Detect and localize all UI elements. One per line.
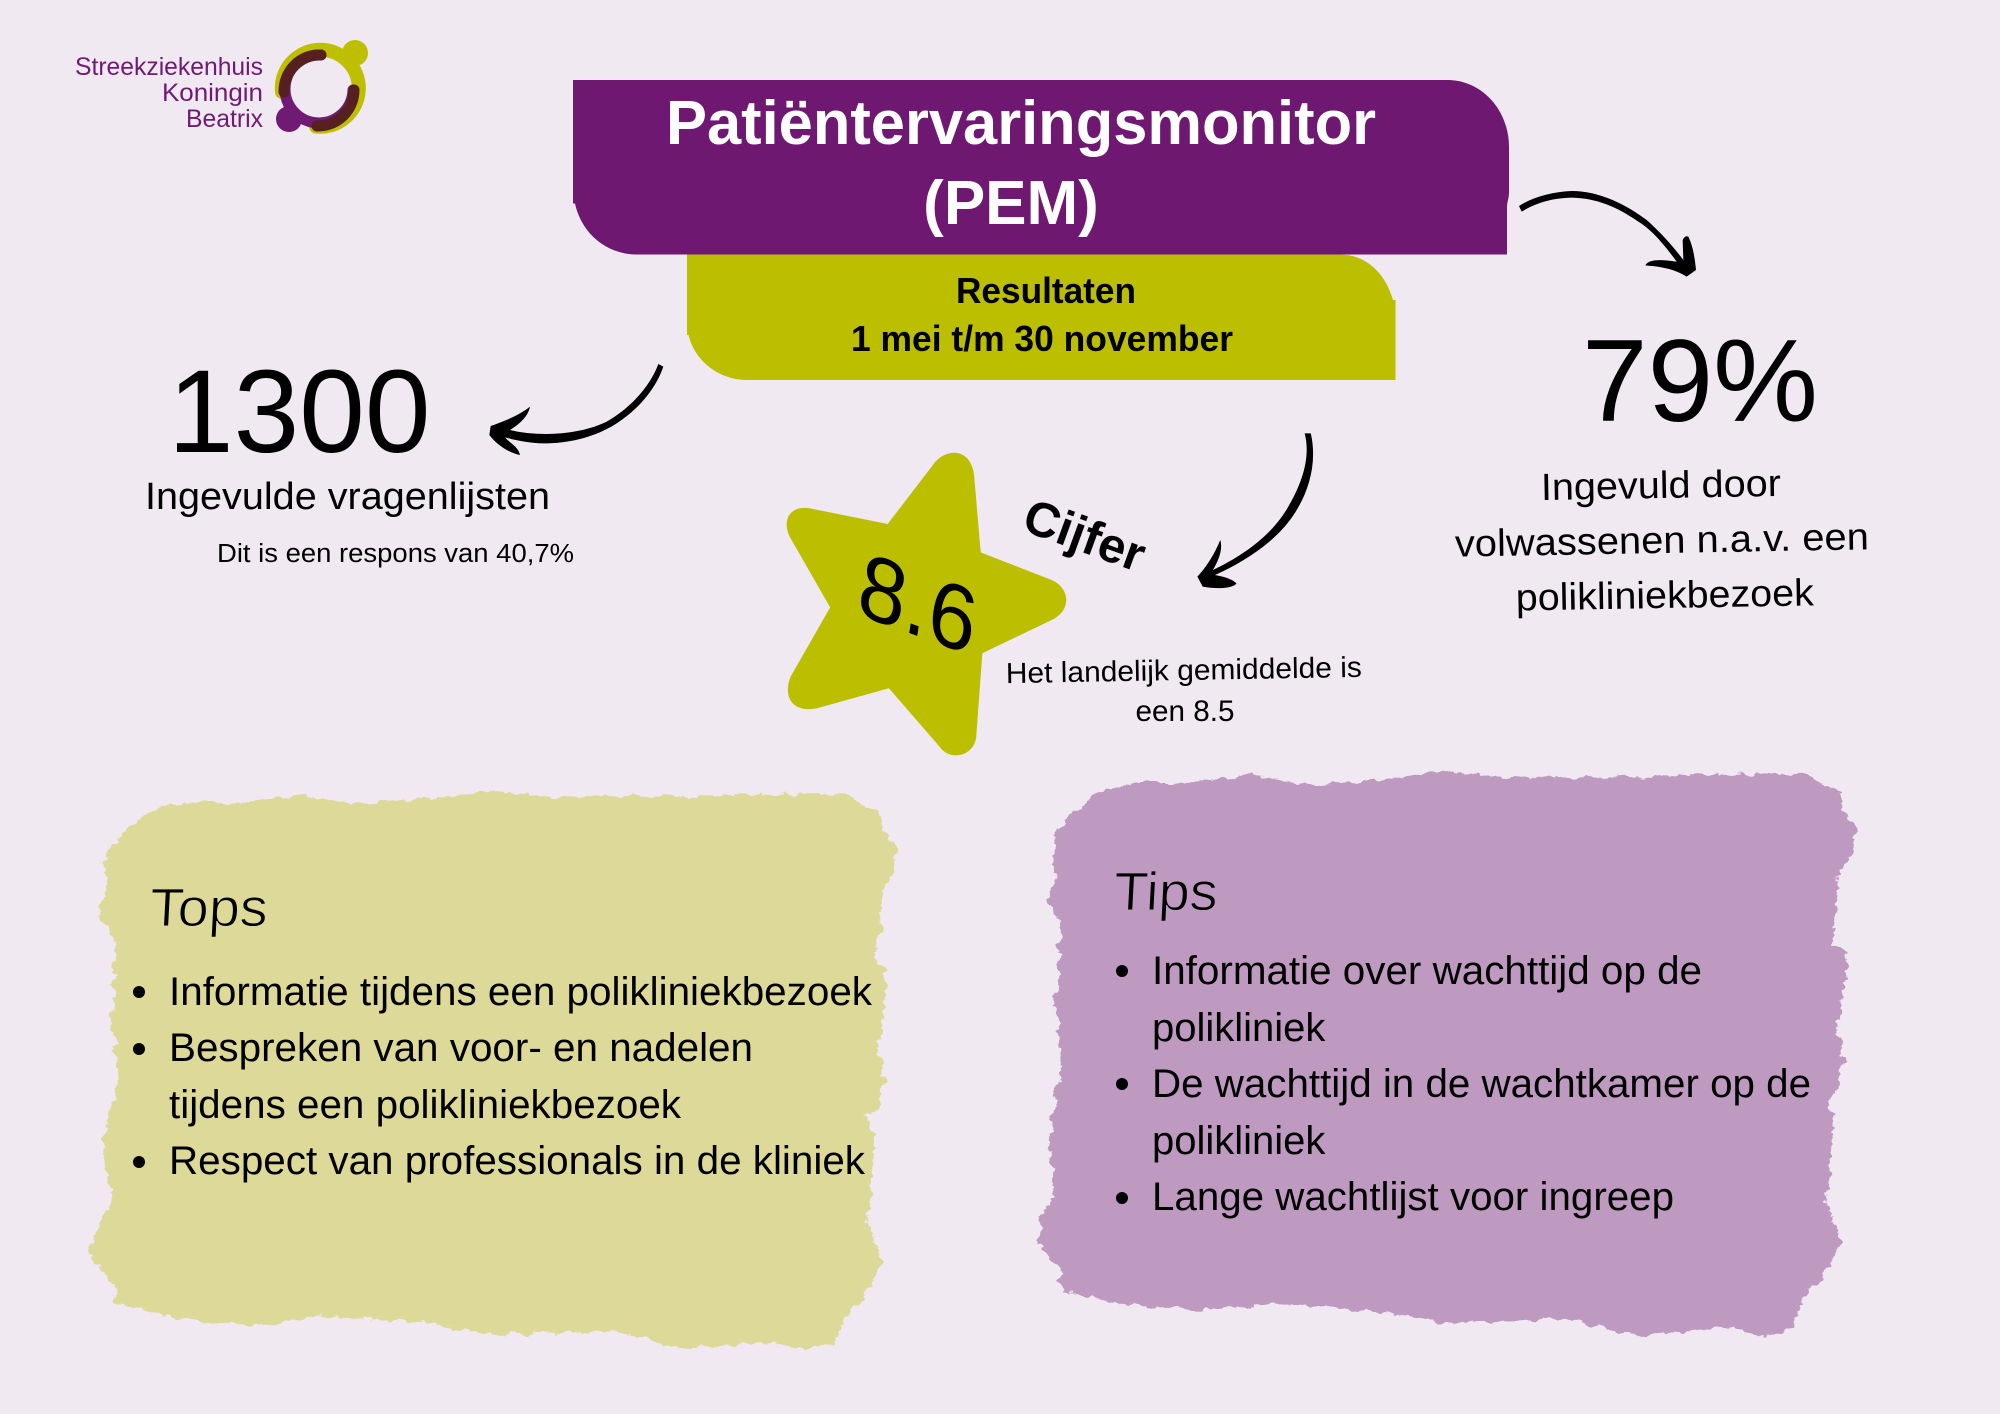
tips list: polikliniek	[1152, 1119, 1326, 1163]
title text: (PEM)	[923, 169, 1099, 238]
subtitle text: 1 mei t/m 30 november	[851, 318, 1233, 359]
arrow: to 79%	[1519, 191, 1696, 277]
title text: Patiëntervaringsmonitor	[666, 89, 1376, 158]
label: cijfer: Cijfer	[1016, 489, 1153, 583]
tops list: tijdens een polikliniekbezoek	[169, 1083, 682, 1127]
tips heading: Tips	[1112, 862, 1220, 922]
stat: 79%	[1454, 315, 1870, 621]
arrow: to 1300	[489, 364, 663, 455]
tips list: De wachttijd in de wachtkamer op de	[1152, 1062, 1811, 1106]
stat caption: polikliniekbezoek	[1515, 572, 1815, 620]
icon: star with score	[787, 453, 1066, 755]
note: landelijk gemiddelde	[1006, 652, 1362, 728]
stat caption	[1454, 461, 1870, 621]
logo ring mark	[276, 40, 368, 132]
stat caption: Ingevulde vragenlijsten	[145, 476, 550, 518]
arrow: to cijfer	[1197, 433, 1313, 588]
panel: tips	[1036, 771, 1856, 1338]
subtitle banner: resultaten	[687, 254, 1396, 380]
title banner	[573, 80, 1509, 254]
stat: 1300 vragenlijsten	[145, 346, 574, 568]
tops list: Bespreken van voor- en nadelen	[169, 1026, 753, 1070]
stat: 1300 vragenlijsten: 1300	[168, 346, 431, 478]
subtitle text	[851, 270, 1233, 359]
tops list	[133, 970, 873, 1183]
tops list: Respect van professionals in de kliniek	[169, 1139, 866, 1183]
stat note: Dit is een respons van 40,7%	[217, 540, 574, 568]
tips list: Lange wachtlijst voor ingreep	[1152, 1175, 1674, 1219]
stat caption: Ingevuld door	[1541, 463, 1782, 509]
logo: Streekziekenhuis Koningin Beatrix	[75, 40, 368, 133]
tips list: polikliniek	[1152, 1006, 1326, 1050]
tips list	[1116, 949, 1811, 1219]
stat caption: volwassenen n.a.v. een	[1455, 516, 1869, 566]
tops list: Informatie tijdens een polikliniekbezoek	[169, 970, 873, 1014]
note: landelijk gemiddelde: een 8.5	[1136, 695, 1234, 728]
logo wordmark: Beatrix	[186, 105, 263, 133]
title text	[666, 89, 1376, 238]
note: landelijk gemiddelde: Het landelijk gemiddelde is	[1006, 652, 1362, 690]
score value: 8.6	[852, 534, 983, 675]
logo wordmark	[75, 53, 263, 133]
panel: tops	[88, 791, 897, 1350]
logo wordmark: Streekziekenhuis	[75, 53, 263, 81]
logo wordmark: Koningin	[162, 79, 263, 107]
tops heading: Tops	[148, 878, 270, 938]
stat: 79%: 79%	[1582, 315, 1818, 446]
subtitle text: Resultaten	[956, 270, 1136, 311]
tips list: Informatie over wachttijd op de	[1152, 949, 1702, 993]
